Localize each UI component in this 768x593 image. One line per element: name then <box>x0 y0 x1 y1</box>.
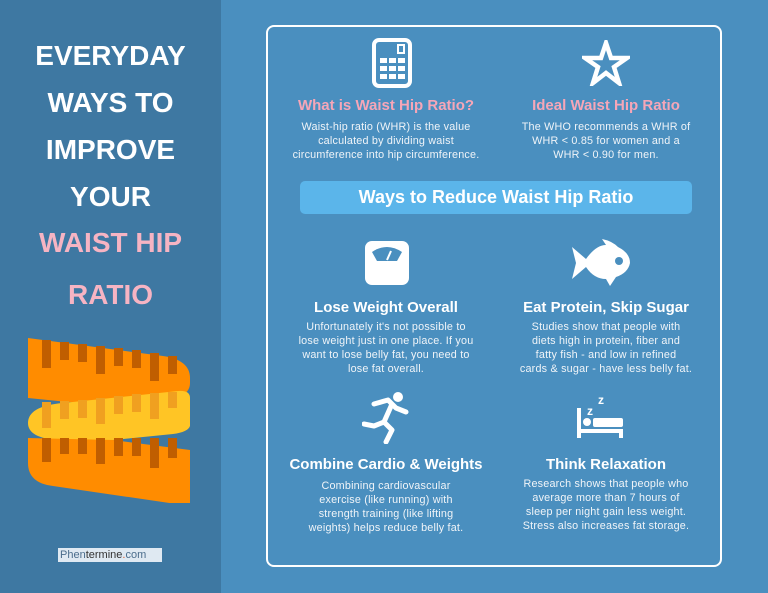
text: protein: Studies show that people with <box>532 321 680 333</box>
heading: what is: What is Waist Hip Ratio? <box>298 97 474 114</box>
title <box>35 40 186 310</box>
text: protein: diets high in protein, fiber and <box>532 335 680 347</box>
icon: sleep: z <box>598 393 604 407</box>
text: relaxation: Stress also increases fat storage. <box>523 520 689 532</box>
banner: ways to reduce <box>300 181 692 214</box>
text: lose weight: lose weight just in one place. If you <box>299 335 473 347</box>
title: WAIST HIP <box>39 227 182 258</box>
text: cardio: Combining cardiovascular <box>321 480 451 492</box>
heading: protein: Eat Protein, Skip Sugar <box>523 299 689 316</box>
text: ideal: The WHO recommends a WHR of <box>522 121 690 133</box>
banner: ways to reduce: Ways to Reduce Waist Hip Ratio <box>359 187 633 207</box>
text: ideal <box>522 121 690 161</box>
title: EVERYDAY <box>35 40 186 71</box>
text: cardio: strength training (like lifting <box>319 508 453 520</box>
text: lose weight <box>299 321 473 375</box>
text: lose weight: want to lose belly fat, you need to <box>302 349 470 361</box>
text: what is: circumference into hip circumference. <box>293 149 479 161</box>
text: ideal: WHR < 0.85 for women and a <box>532 135 680 147</box>
icon: runner <box>362 392 408 444</box>
heading: ideal: Ideal Waist Hip Ratio <box>532 97 680 114</box>
icon: calculator <box>372 38 412 88</box>
text: protein <box>520 321 692 375</box>
title: IMPROVE <box>46 134 175 165</box>
text: cardio: weights) helps reduce belly fat. <box>309 522 463 534</box>
text: what is: calculated by dividing waist <box>318 135 454 147</box>
text: relaxation: Research shows that people who <box>523 478 689 490</box>
icon: sleep: z <box>587 404 593 418</box>
text: relaxation: average more than 7 hours of <box>532 492 680 504</box>
icon: measuring tape <box>28 338 190 503</box>
text: ideal: WHR < 0.90 for men. <box>553 149 659 161</box>
text: relaxation: sleep per night gain less weight. <box>526 506 686 518</box>
text: lose weight: lose fat overall. <box>348 363 424 375</box>
text: cardio: exercise (like running) with <box>319 494 453 506</box>
text: what is: Waist-hip ratio (WHR) is the value <box>302 121 470 133</box>
title: WAYS TO <box>47 87 174 118</box>
heading: lose weight: Lose Weight Overall <box>314 299 458 316</box>
icon: star <box>582 40 630 86</box>
title: YOUR <box>70 181 151 212</box>
icon: sleep <box>577 393 623 438</box>
icon: fish <box>572 239 630 286</box>
heading: cardio: Combine Cardio & Weights <box>289 456 483 473</box>
heading: relaxation: Think Relaxation <box>546 456 666 473</box>
panel: main card <box>266 25 722 567</box>
text: what is <box>293 121 479 161</box>
icon: scale <box>365 241 409 285</box>
text: cardio <box>308 480 463 534</box>
text: lose weight: Unfortunately it's not possible to <box>306 321 466 333</box>
text: protein: cards & sugar - have less belly fat. <box>520 363 692 375</box>
logo: Phentermine.com <box>60 549 146 561</box>
text: protein: fatty fish - and low in refined <box>536 349 676 361</box>
text: relaxation <box>523 478 689 532</box>
panel: left sidebar <box>0 0 221 593</box>
title: RATIO <box>68 279 153 310</box>
